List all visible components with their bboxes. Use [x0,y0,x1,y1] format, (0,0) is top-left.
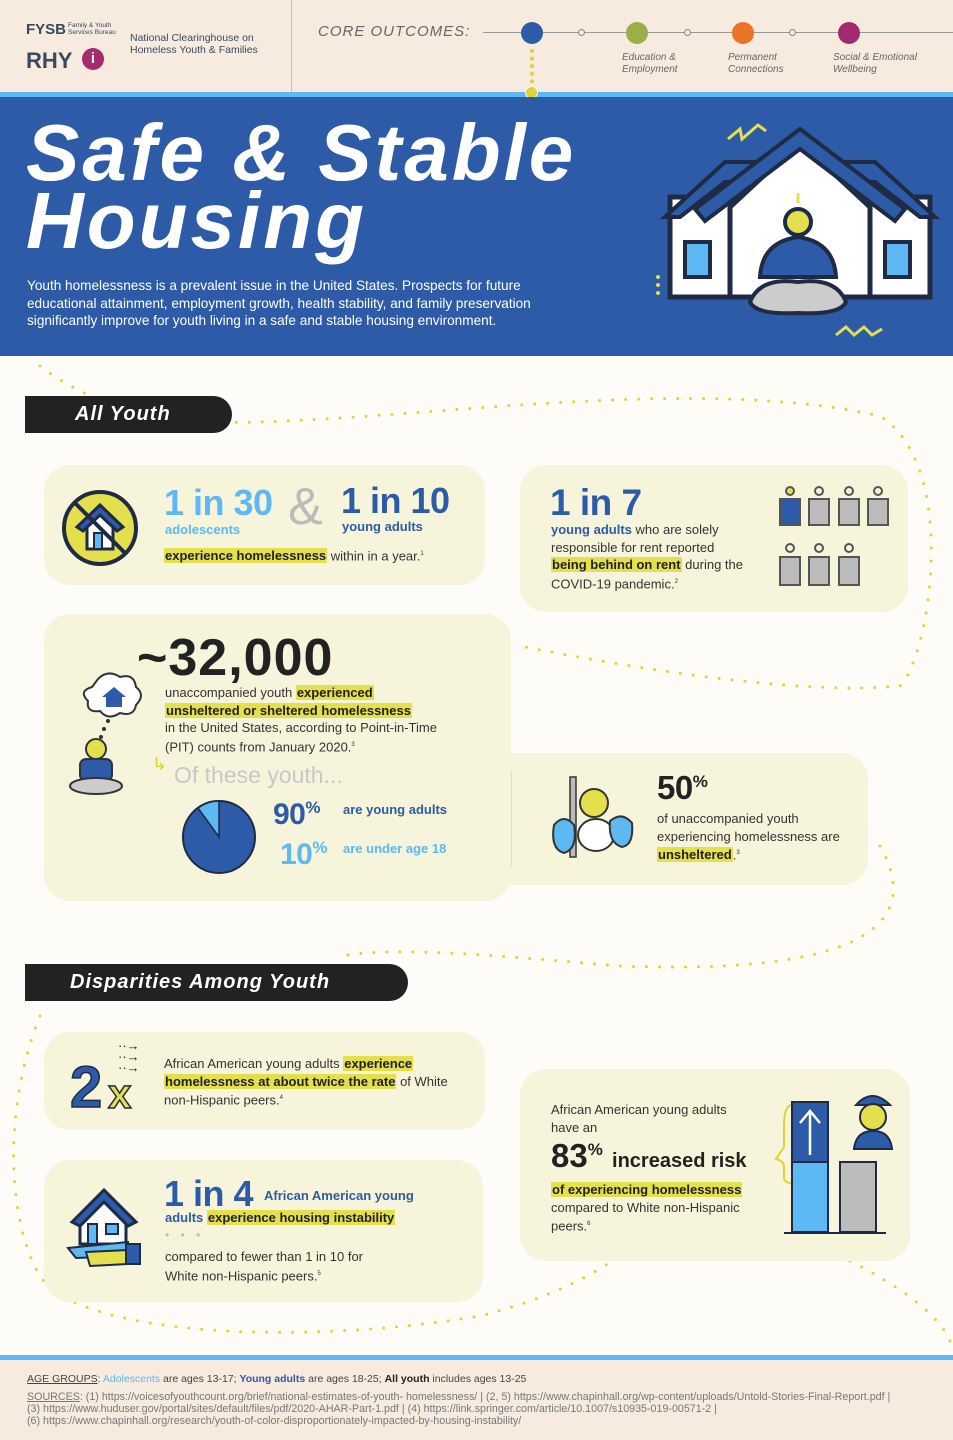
core outcomes: Education & [622,52,676,63]
panel: 1 in 4: 1 in 4 [164,1173,253,1214]
panel: 32,000: Of these youth... [174,762,343,788]
title: Safe & Stable [26,108,576,197]
panel: 83% increased risk [520,1069,910,1261]
bar chart [774,1101,886,1234]
icon: youth dreaming of home [69,672,142,795]
panel: 32,000: ~32,000 [137,629,333,687]
panel: 1 in 4: African American young [264,1188,414,1203]
panel: 32,000: are young adults [343,802,447,817]
panel: 1 in 7: young adults who are solely responsible for rent reported being behind on rent during the COVID-19 pandemic.2 [551,522,743,591]
icon: 2x: ··→ [118,1049,140,1064]
panel: 1 in 4: • • • [165,1228,204,1242]
logo: Services Bureau [68,29,116,36]
section heading: Disparities: Disparities Among Youth [70,971,330,993]
panel: 83% increased risk: African American young adults [551,1102,727,1117]
panel: 32,000: 10% [280,838,327,871]
panel: 2x: African American young adults experience [164,1056,412,1071]
panel: 2x: ··→ [118,1038,140,1053]
logo: i [91,50,95,67]
panel: 1 in 7 [520,465,908,612]
title: Housing [26,176,367,265]
panel: 1 in 30 & 1 in 10 [44,465,485,585]
panel: 1 in 30 & 1 in 10: young adults [342,519,423,534]
panel: 32,000: 90% [273,798,320,831]
sources: SOURCES: (1) https://voicesofyouthcount.org/brief/national-estimates-of-youth- homelessness/ | (2, 5) https://www.chapinhall.org/wp-content/uploads/Untold-Stories-Final-Report.pdf | [27,1391,890,1403]
age groups note: AGE GROUPS: Adolescents are ages 13-17; Young adults are ages 18-25; All youth includes ages 13-25 [27,1373,526,1385]
intro text: Youth homelessness is a prevalent issue in the United States. Prospects for future educational attainment, employment growth, health stability, and family preservation significantly improve for youth living in a safe and stable housing environment. [27,278,531,328]
header bar [0,0,953,92]
panel: 1 in 4: compared to fewer than 1 in 10 for [165,1249,363,1264]
icon: house with meditating person [656,123,940,337]
section heading: Disparities [25,964,408,1001]
panel: 1 in 30 & 1 in 10: experience homelessness within in a year.1 [165,548,424,563]
logo [26,21,258,73]
icon: worried youth [852,1095,894,1150]
core outcomes: Employment [622,64,678,75]
core outcomes: Social & Emotional [833,52,917,63]
panel: 32,000 [44,614,511,901]
panel: 50% unsheltered: 50% [657,769,707,806]
panel: 83% increased risk: 83% increased risk [551,1137,747,1174]
hero band [0,97,953,356]
panel: 2x [44,1032,485,1130]
core outcomes: CORE OUTCOMES: [318,23,470,40]
core outcomes [318,22,953,84]
icon: youth with bags [552,776,634,858]
panel: 50% unsheltered: of unaccompanied youth experiencing homelessness are unsheltered.3 [657,811,840,862]
icon: no house [62,490,138,566]
panel: 1 in 30 & 1 in 10: & [288,478,323,536]
logo: National Clearinghouse on [130,32,254,44]
panel: 50% unsheltered [490,753,868,885]
icon: 2x: ··→ [118,1060,140,1075]
panel: 1 in 7: 1 in 7 [550,482,642,523]
panel: 32,000: are under age 18 [343,841,446,856]
panel: 1 in 30 & 1 in 10: adolescents [165,522,240,537]
panel: 32,000: unaccompanied youth experienced [165,685,373,700]
core outcomes: Permanent [728,52,777,63]
panel: 32,000: in the United States, according to Point-in-Time (PIT) counts from January 2020.3 [165,720,437,754]
panel: 83% increased risk: of experiencing homelessness [552,1182,741,1197]
icon: 2x [70,1038,140,1120]
pie chart [182,800,256,874]
sources [27,1391,890,1427]
panel: 2x: homelessness at about twice the rate of White non-Hispanic peers.4 [164,1074,448,1107]
section heading: All Youth [25,396,232,433]
icon: 2x: 2 [70,1055,102,1120]
icon: 2x: x [108,1070,131,1117]
panel: 32,000: ↳ [152,754,167,774]
title [26,108,576,265]
footer [0,1355,953,1360]
core outcomes: Wellbeing [833,64,877,75]
panel: 83% increased risk: have an [551,1120,597,1134]
panel: 1 in 4 [44,1160,483,1302]
panel: 1 in 30 & 1 in 10: 1 in 30 [164,482,273,523]
logo: RHY [26,48,72,73]
core outcomes: Connections [728,64,784,75]
panel: 32,000: unsheltered or sheltered homelessness [166,702,411,718]
dotted path decoration [12,364,952,1342]
sources: (3) https://www.huduser.gov/portal/sites/default/files/pdf/2020-AHAR-Part-1.pdf | (4) https://link.springer.com/article/10.1007/s10935-019-00571-2 | [27,1403,717,1415]
panel: 1 in 30 & 1 in 10: 1 in 10 [341,480,450,521]
panel: 1 in 4: White non-Hispanic peers.5 [165,1268,321,1283]
icon: people grid [779,486,889,586]
section heading: All Youth: All Youth [75,403,171,425]
sources: (6) https://www.chapinhall.org/research/youth-of-color-disproportionately-impacted-by-housing-instability/ [27,1415,521,1427]
icon: house in hand [66,1188,141,1267]
panel: 1 in 4: adults experience housing instability [165,1210,394,1225]
logo: FYSB [26,21,66,38]
logo: Family & Youth [68,22,111,29]
panel: 83% increased risk: compared to White non-Hispanic peers.6 [551,1200,740,1233]
logo: Homeless Youth & Families [130,44,258,56]
